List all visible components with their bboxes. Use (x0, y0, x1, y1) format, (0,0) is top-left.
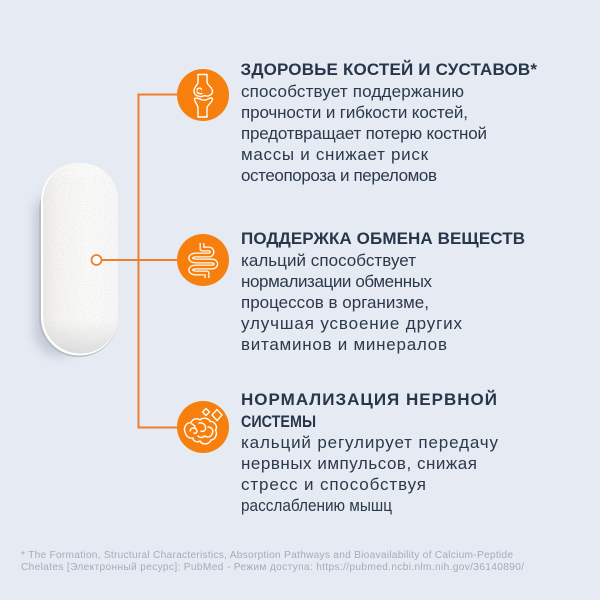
text block: nervous system: стресс и способствуя (241, 475, 426, 494)
pill marker dot (92, 255, 102, 265)
footnote: Chelates [Электронный ресурс]: PubMed - Режим доступа: https://pubmed.ncbi.nlm.nih.gov/36140890/ (21, 562, 524, 573)
text block: bones and joints: ЗДОРОВЬЕ КОСТЕЙ И СУСТАВОВ* (240, 60, 537, 79)
text block: nervous system: кальций регулирует передачу (241, 433, 498, 452)
text block: metabolism: кальций способствует (241, 251, 416, 270)
footnote: * The Formation, Structural Characteristics, Absorption Pathways and Bioavailability of Calcium-Peptide (21, 550, 513, 561)
footnote (21, 550, 524, 573)
text block: bones and joints: остеопороза и переломов (241, 166, 437, 185)
text block: metabolism: витаминов и минералов (241, 335, 447, 354)
icon: intestine (177, 234, 229, 286)
text block: nervous system (241, 390, 498, 515)
text block: bones and joints (240, 60, 537, 185)
icon: brain with sparkles (177, 401, 229, 453)
text block: nervous system: нервных импульсов, снижая (241, 454, 477, 473)
text block: bones and joints: прочности и гибкости костей, (241, 103, 468, 122)
text block: nervous system: СИСТЕМЫ (241, 412, 316, 431)
connector lines (101, 94, 177, 428)
text block: metabolism: нормализации обменных (241, 272, 432, 291)
text block: nervous system: расслаблению мышц (241, 496, 392, 515)
pill (34, 163, 118, 357)
text block: metabolism (241, 229, 525, 354)
text block: nervous system: НОРМАЛИЗАЦИЯ НЕРВНОЙ (241, 390, 497, 409)
text block: bones and joints: способствует поддержанию (241, 82, 464, 101)
text block: metabolism: процессов в организме, (241, 293, 429, 312)
icon: joint (177, 69, 229, 121)
text block: bones and joints: предотвращает потерю костной (241, 124, 487, 143)
text block: bones and joints: массы и снижает риск (241, 145, 429, 164)
text block: metabolism: ПОДДЕРЖКА ОБМЕНА ВЕЩЕСТВ (241, 229, 525, 248)
text block: metabolism: улучшая усвоение других (241, 314, 462, 333)
